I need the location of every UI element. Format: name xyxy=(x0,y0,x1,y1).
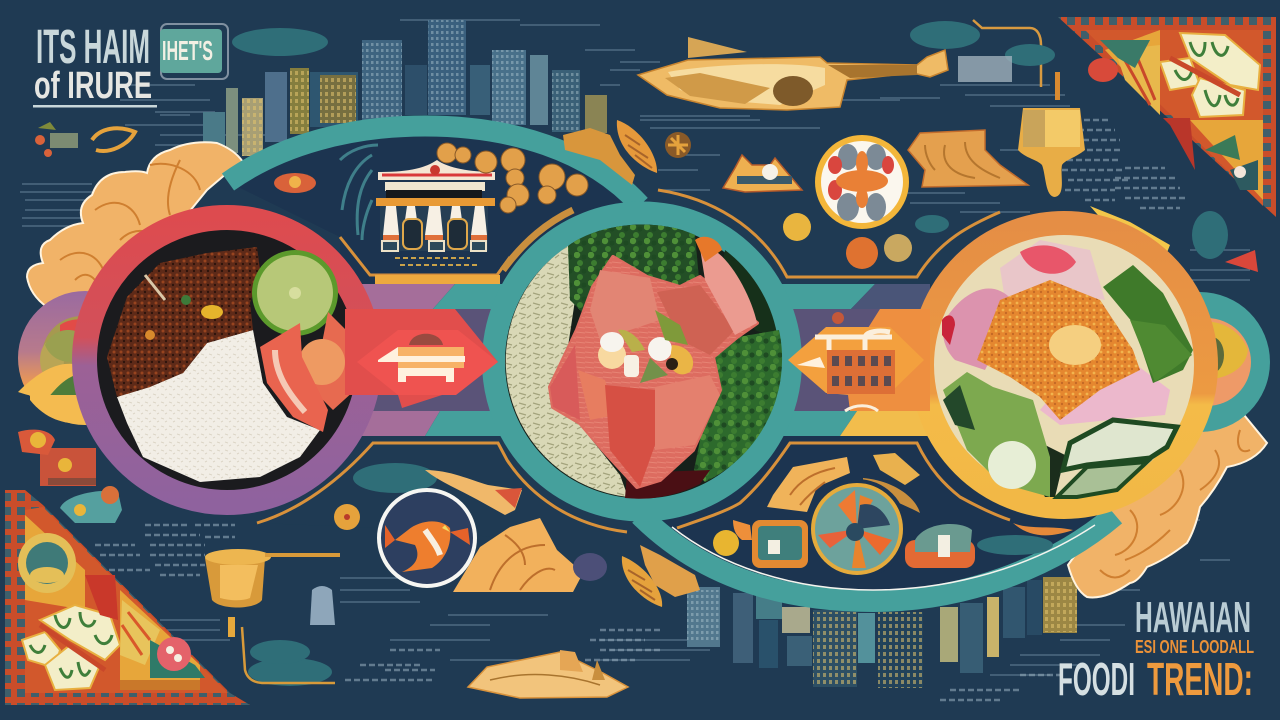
gold pastry strip xyxy=(503,210,573,270)
gold boat top xyxy=(638,37,948,110)
folded leaves bowl xyxy=(1160,33,1260,117)
vignette right of wheel xyxy=(905,524,975,568)
top right pattern triangle xyxy=(1058,17,1276,217)
gold rock xyxy=(908,130,1028,187)
bottom left pattern triangle xyxy=(5,490,250,705)
teal vignette lower left xyxy=(60,486,122,523)
decorated plate xyxy=(815,135,909,229)
teal upper arc xyxy=(228,126,640,205)
folded leaves bowl xyxy=(22,605,120,690)
orange cloud left xyxy=(27,142,243,307)
title badge: IHET'S xyxy=(162,35,213,66)
striped leaf lower xyxy=(622,556,662,607)
gold vessel and banana xyxy=(863,453,920,513)
pastry strip above arc xyxy=(563,128,635,185)
flying orange fish xyxy=(425,470,522,515)
purple blob xyxy=(573,553,607,581)
trend title block xyxy=(1058,593,1254,705)
yellow splash behind right ring xyxy=(1090,206,1170,270)
palm decoration xyxy=(340,145,378,240)
small figure vignette xyxy=(310,586,335,625)
wheel medallion xyxy=(807,479,907,579)
pastry lower xyxy=(640,545,700,597)
orange garnish top right xyxy=(695,237,722,262)
upper arc panel xyxy=(228,126,640,285)
middle ring and bowl xyxy=(494,213,790,510)
teal clouds top xyxy=(232,21,1228,259)
orange flame strip xyxy=(1013,523,1073,535)
small gold bar xyxy=(1055,72,1060,100)
connector upper strips xyxy=(340,284,930,310)
gold strip under shrine xyxy=(375,275,500,284)
centre garnish xyxy=(598,310,693,383)
gold line top right xyxy=(973,20,1041,87)
vignette left of wheel xyxy=(752,520,808,568)
gold boat bottom xyxy=(468,650,628,698)
pink meats xyxy=(942,240,1170,425)
small cottage lower left xyxy=(18,430,96,486)
red hexagon arrow xyxy=(345,309,498,408)
left junction panel xyxy=(258,436,640,545)
rice mound xyxy=(117,330,320,482)
striped leaf top xyxy=(617,120,657,173)
shrine building xyxy=(376,160,495,265)
small round top xyxy=(665,132,691,158)
right ring and bowl xyxy=(922,223,1206,507)
small food tray xyxy=(723,155,802,192)
title badge xyxy=(160,24,228,79)
central purple band xyxy=(340,309,940,411)
small orange emblem in panel xyxy=(274,173,316,193)
red horn xyxy=(1225,250,1258,272)
title block: of IRURE xyxy=(34,65,152,107)
lettuce xyxy=(943,372,1065,497)
leaf medallion xyxy=(18,533,76,593)
fish medallion xyxy=(379,490,475,586)
round ornament lower left xyxy=(334,504,360,530)
brown topping xyxy=(107,247,260,397)
teal clouds lower xyxy=(248,463,1053,686)
rice side xyxy=(506,240,628,497)
parsley xyxy=(1103,265,1193,383)
lime slice xyxy=(252,250,338,336)
title block xyxy=(33,21,157,108)
orange crumble xyxy=(977,280,1140,420)
gold cloud lower xyxy=(453,518,583,592)
dark sauce xyxy=(625,470,710,499)
right parsley xyxy=(694,330,782,482)
left ring and bowl xyxy=(84,218,370,502)
small white building vignette xyxy=(958,56,1012,82)
lower arc panel xyxy=(640,436,1115,601)
gold pot xyxy=(205,549,340,637)
cucumber slices xyxy=(1057,420,1177,497)
gold rock lower xyxy=(767,457,850,512)
connector lower strips xyxy=(340,411,930,436)
tuna slices xyxy=(550,247,757,487)
small round ornaments top right xyxy=(783,213,912,269)
teal lower arc xyxy=(640,515,1115,601)
gold frame lines xyxy=(257,190,1010,532)
skyline: bottom city xyxy=(687,577,1077,688)
gold tray frame lower xyxy=(242,627,335,683)
salmon slices xyxy=(260,312,355,432)
gold chalice xyxy=(1018,108,1085,197)
left stub circle xyxy=(18,291,152,425)
round badge near wheel xyxy=(713,530,739,556)
dark greens right xyxy=(720,250,778,340)
pastry cluster xyxy=(437,143,588,213)
orange hexagon arrow xyxy=(788,309,930,411)
orange cloud right xyxy=(1068,410,1267,597)
title block: ITS HAIM xyxy=(36,21,150,74)
top greens xyxy=(568,225,700,320)
top left flower and fish emblem xyxy=(35,122,135,157)
trend title block: FOODI xyxy=(1058,653,1135,705)
orange ear near wheel xyxy=(733,520,752,540)
right stub circle xyxy=(1130,292,1270,432)
skyline: top city xyxy=(203,20,607,156)
